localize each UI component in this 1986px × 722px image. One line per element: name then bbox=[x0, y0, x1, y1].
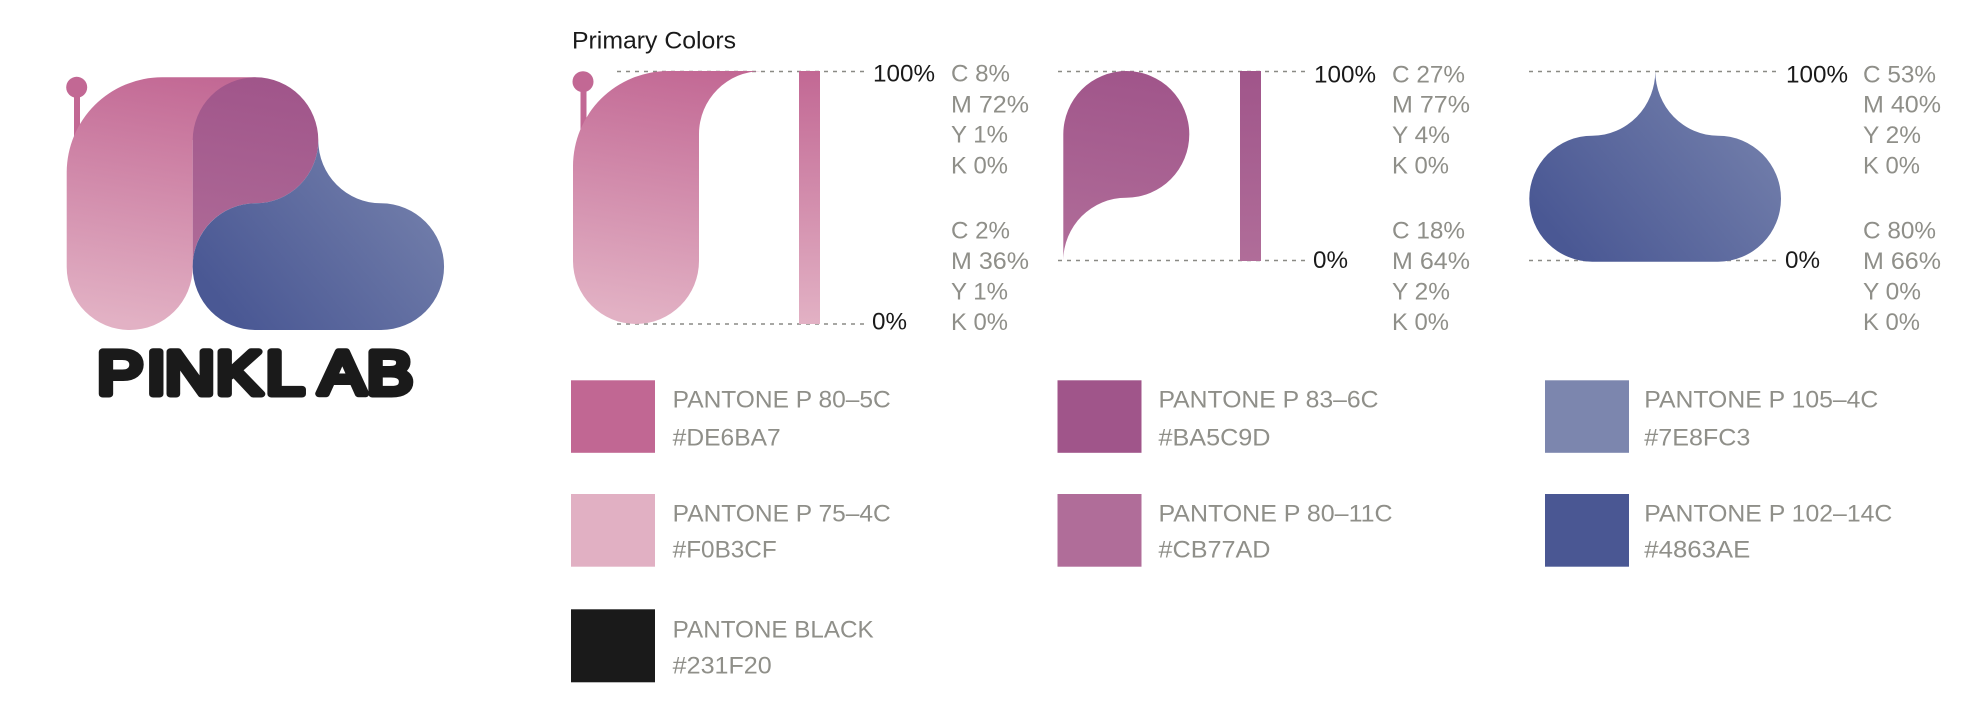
scale labels: 0% bbox=[872, 308, 907, 336]
CMYK values top: Y 2% bbox=[1863, 122, 1921, 149]
CMYK values top bbox=[1863, 61, 1941, 180]
logo shape: blue bbox=[193, 140, 444, 330]
swatch: CB77AD: PANTONE P 80–11C bbox=[1158, 501, 1392, 528]
CMYK values bottom: Y 1% bbox=[951, 278, 1008, 306]
swatch: CB77AD bbox=[1058, 494, 1392, 567]
CMYK values bottom: K 0% bbox=[1863, 309, 1920, 336]
blue shape bbox=[1529, 71, 1781, 262]
panel: purple gradient bbox=[1058, 61, 1470, 336]
CMYK values top: K 0% bbox=[1392, 152, 1449, 180]
CMYK values bottom bbox=[951, 217, 1029, 336]
scale labels: 100% bbox=[1786, 61, 1848, 88]
CMYK values top bbox=[951, 61, 1029, 179]
logo: Pinklab bbox=[66, 77, 444, 407]
CMYK values bottom: K 0% bbox=[1392, 309, 1449, 336]
CMYK values top bbox=[1392, 61, 1470, 180]
purple shape bbox=[1063, 71, 1189, 261]
scale labels: 100% bbox=[873, 61, 935, 88]
CMYK values top: M 40% bbox=[1863, 92, 1941, 118]
scale labels: 0% bbox=[1313, 247, 1348, 274]
swatch: 7E8FC3: PANTONE P 105–4C bbox=[1644, 387, 1878, 414]
swatch: DE6BA7: PANTONE P 80–5C bbox=[673, 387, 891, 414]
swatch: 4863AE bbox=[1545, 494, 1892, 567]
CMYK values top: M 77% bbox=[1392, 92, 1470, 118]
CMYK values bottom: C 80% bbox=[1863, 218, 1936, 245]
swatch: 4863AE: PANTONE P 102–14C bbox=[1644, 501, 1892, 528]
CMYK values top: Y 4% bbox=[1392, 122, 1450, 149]
CMYK values top: M 72% bbox=[951, 91, 1029, 118]
scale labels: 0% bbox=[1785, 247, 1820, 274]
dotted guides bbox=[1058, 72, 1309, 260]
CMYK values bottom: M 36% bbox=[951, 248, 1029, 275]
pink gradient bar bbox=[799, 71, 820, 324]
swatch: F0B3CF: #F0B3CF bbox=[673, 536, 777, 563]
scale labels bbox=[1785, 61, 1848, 274]
CMYK values bottom: Y 2% bbox=[1392, 278, 1450, 306]
pink icon antenna bbox=[572, 71, 594, 134]
swatch: 7E8FC3 bbox=[1545, 380, 1878, 453]
panel: blue gradient bbox=[1529, 61, 1941, 336]
scale labels bbox=[872, 61, 935, 335]
scale labels bbox=[1313, 61, 1376, 274]
heading: Primary Colors bbox=[572, 27, 736, 54]
CMYK values bottom bbox=[1863, 218, 1941, 336]
purple gradient bar bbox=[1240, 71, 1261, 261]
pink shape bbox=[573, 71, 762, 324]
swatch: 231F20 bbox=[571, 609, 874, 682]
logo icon: antenna bbox=[66, 77, 87, 140]
CMYK values bottom bbox=[1392, 218, 1470, 336]
swatch: CB77AD: #CB77AD bbox=[1158, 536, 1270, 563]
logo shape: purple bbox=[193, 77, 318, 267]
swatch: 231F20: PANTONE BLACK bbox=[673, 617, 874, 644]
CMYK values bottom: M 66% bbox=[1863, 248, 1941, 275]
swatch: F0B3CF: PANTONE P 75–4C bbox=[673, 501, 891, 528]
CMYK values top: K 0% bbox=[951, 152, 1008, 179]
CMYK values top: C 27% bbox=[1392, 61, 1465, 88]
swatch: BA5C9D bbox=[1058, 380, 1378, 453]
swatch: 4863AE: #4863AE bbox=[1644, 536, 1750, 563]
logo shape: pink bbox=[67, 77, 256, 330]
logo wordmark: PINKLAB bbox=[97, 339, 413, 407]
CMYK values bottom: K 0% bbox=[951, 309, 1008, 336]
swatch: DE6BA7: #DE6BA7 bbox=[673, 425, 781, 452]
swatch: BA5C9D: PANTONE P 83–6C bbox=[1158, 387, 1378, 414]
swatch: DE6BA7 bbox=[571, 380, 891, 453]
dotted guides bbox=[617, 72, 868, 324]
CMYK values top: C 8% bbox=[951, 61, 1010, 88]
CMYK values top: K 0% bbox=[1863, 152, 1920, 180]
swatch: F0B3CF bbox=[571, 494, 891, 567]
CMYK values bottom: M 64% bbox=[1392, 248, 1470, 275]
CMYK values top: Y 1% bbox=[951, 122, 1008, 149]
swatch: 7E8FC3: #7E8FC3 bbox=[1644, 425, 1750, 452]
CMYK values top: C 53% bbox=[1863, 61, 1936, 88]
swatch: BA5C9D: #BA5C9D bbox=[1158, 425, 1270, 452]
CMYK values bottom: C 2% bbox=[951, 217, 1010, 244]
scale labels: 100% bbox=[1314, 61, 1376, 88]
panel: pink gradient bbox=[572, 61, 1029, 336]
swatch: 231F20: #231F20 bbox=[673, 652, 772, 679]
CMYK values bottom: C 18% bbox=[1392, 218, 1465, 245]
CMYK values bottom: Y 0% bbox=[1863, 278, 1921, 306]
dotted guides bbox=[1529, 72, 1781, 260]
